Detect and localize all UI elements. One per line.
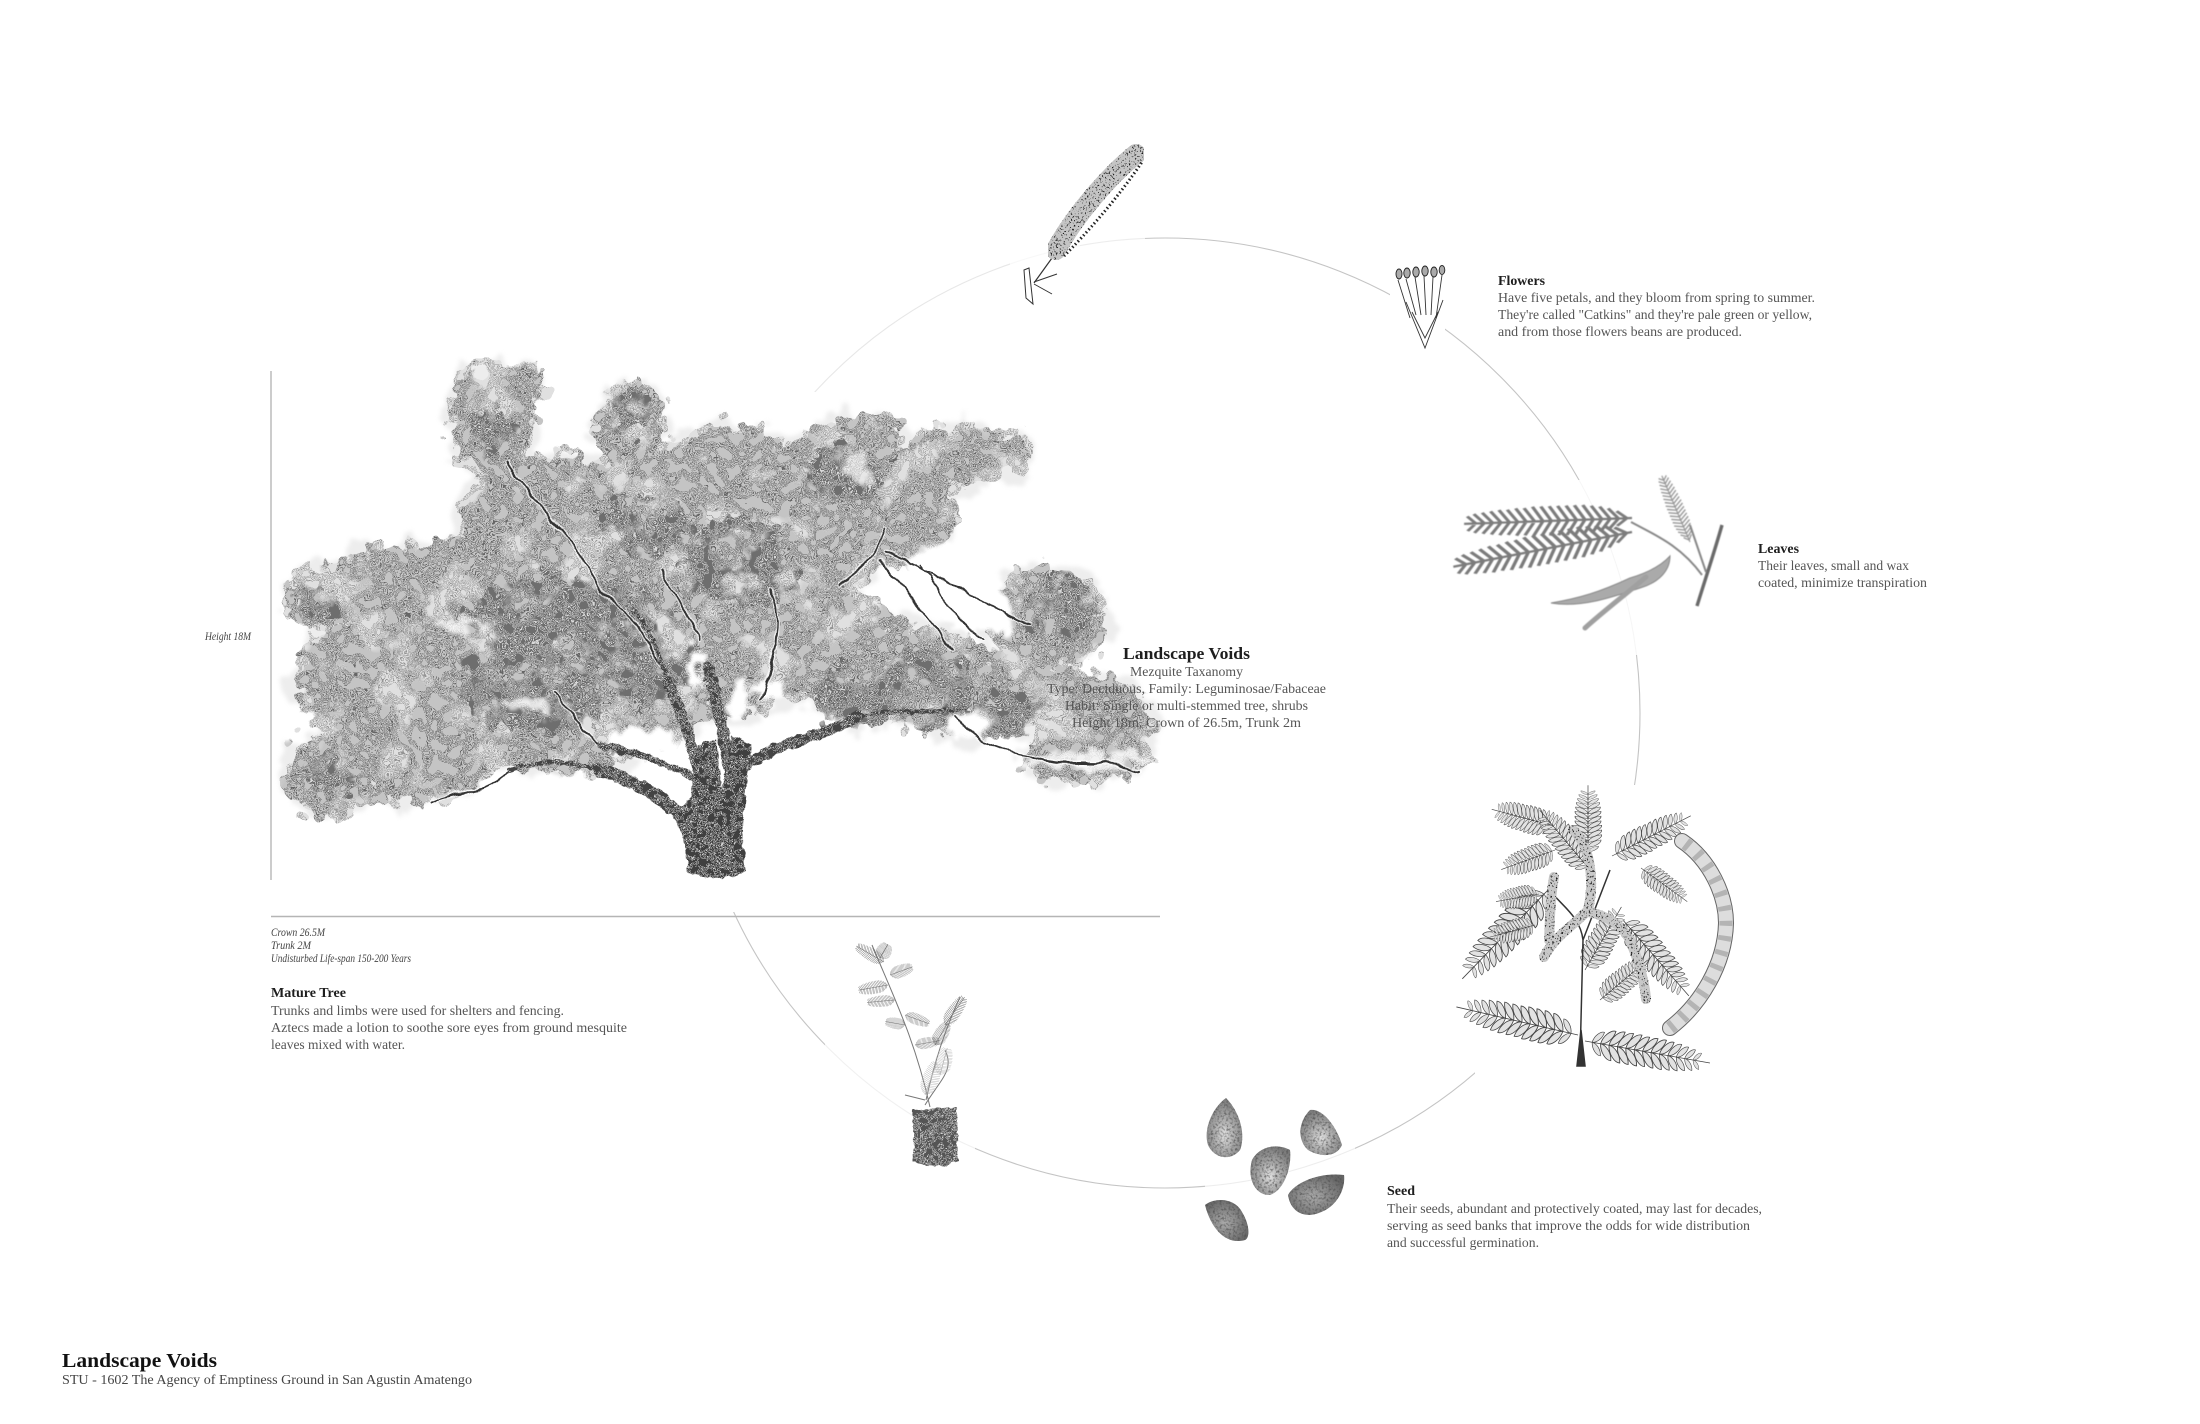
text: seed (1387, 1183, 1762, 1250)
text: mature tree: Aztecs made a lotion to soothe sore eyes from ground mesquite (271, 1020, 627, 1035)
text: leaves: coated, minimize transpiration (1758, 575, 1927, 590)
central taxonomy text: Type: Deciduous, Family: Leguminosae/Fabaceae (1047, 681, 1326, 696)
icon: flower (1396, 266, 1445, 348)
text: leaves: Leaves (1758, 541, 1799, 556)
voids between branches (430, 454, 1150, 804)
label: height: Height 18M (204, 631, 252, 643)
trunk (670, 735, 752, 878)
faded circle sections behind the images (272, 130, 1735, 1240)
footer title: STU - 1602 The Agency of Emptiness Ground in San Agustin Amatengo (62, 1373, 472, 1388)
text: mature tree: Mature Tree (271, 985, 346, 1000)
dimensions text (271, 927, 411, 965)
icon: sapling (853, 940, 970, 1166)
central taxonomy text (1047, 644, 1326, 730)
text: seed: and successful germination. (1387, 1235, 1539, 1250)
text: flowers (1498, 273, 1815, 339)
text: flowers: They're called "Catkins" and they're pale green or yellow, (1498, 307, 1812, 322)
foliage halo (285, 363, 1153, 814)
central taxonomy text: Landscape Voids (1123, 644, 1250, 663)
text: mature tree (271, 985, 627, 1052)
text: leaves: Their leaves, small and wax (1758, 558, 1909, 573)
text: seed: Seed (1387, 1183, 1416, 1198)
dimensions text: Undisturbed Life-span 150-200 Years (271, 953, 411, 965)
icon: catkin (1024, 154, 1142, 304)
text: seed: serving as seed banks that improve the odds for wide distribution (1387, 1218, 1750, 1233)
text: leaves (1758, 541, 1927, 590)
mature tree illustration (285, 363, 1153, 878)
text: seed: Their seeds, abundant and protectively coated, may last for decades, (1387, 1201, 1762, 1216)
footer title: Landscape Voids (62, 1350, 217, 1372)
thin branches (430, 462, 1140, 803)
central taxonomy text: Habit: Single or multi-stemmed tree, shrubs (1065, 698, 1308, 713)
text: flowers: Flowers (1498, 273, 1545, 288)
central taxonomy text: Mezquite Taxanomy (1130, 664, 1243, 679)
foliage scribble (285, 363, 1153, 814)
icon: seeds (1205, 1098, 1344, 1241)
limbs (510, 610, 965, 832)
dimensions text: Trunk 2M (271, 940, 312, 952)
dense foliage (293, 391, 1093, 794)
life cycle circle (690, 238, 1640, 1188)
height dimension line (270, 371, 272, 880)
icon: flowering branch with pod (1448, 785, 1726, 1081)
pale foliage scribble (285, 363, 1153, 814)
text: mature tree: Trunks and limbs were used for shelters and fencing. (271, 1003, 564, 1018)
central taxonomy text: Height 18m, Crown of 26.5m, Trunk 2m (1072, 715, 1302, 730)
text: mature tree: leaves mixed with water. (271, 1037, 405, 1052)
text: flowers: Have five petals, and they bloom from spring to summer. (1498, 290, 1815, 305)
dimensions text: Crown 26.5M (271, 927, 326, 939)
text: flowers: and from those flowers beans are produced. (1498, 324, 1742, 339)
footer title (62, 1350, 472, 1388)
crown dimension line (271, 916, 1160, 918)
icon: leaves (1450, 472, 1722, 628)
